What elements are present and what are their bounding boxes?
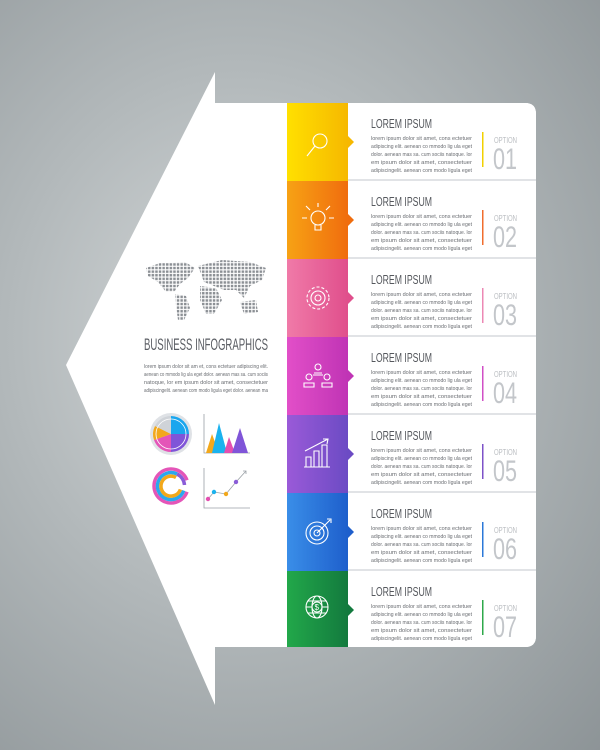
row 07: em ipsum dolor sit amet, consectetuer (371, 628, 472, 634)
row 07: adipiscing elit. aenean co mmodo lig ula eget (371, 612, 472, 618)
row 01: dolor. aenean mas sa. cum sociis natoque. lor (371, 152, 472, 158)
intro text: lorem ipsum dolor sit am et, cons ectetuer adipiscing elit. (144, 364, 268, 370)
icon: line chart (204, 468, 250, 508)
row 06: dolor. aenean mas sa. cum sociis natoque. lor (371, 542, 472, 548)
row 05: 05 (493, 455, 517, 488)
intro text: aenean co mmodo lig ula eget dolor. aenean mas sa. cum sociis (144, 372, 268, 378)
row 06: adipiscingelit. aenean com modo ligula eget (371, 558, 472, 564)
row 07: $ (314, 603, 320, 612)
row 07: dolor. aenean mas sa. cum sociis natoque. lor (371, 620, 472, 626)
row 03 (287, 259, 536, 337)
row 05: dolor. aenean mas sa. cum sociis natoque. lor (371, 464, 472, 470)
row 02: adipiscing elit. aenean co mmodo lig ula eget (371, 222, 472, 228)
row 01 (287, 103, 536, 181)
row 04: LOREM IPSUM (371, 350, 432, 365)
row 05: LOREM IPSUM (371, 428, 432, 443)
row 01: LOREM IPSUM (371, 116, 432, 131)
row 02: 02 (493, 221, 517, 254)
row 05: OPTION (494, 448, 517, 457)
row 02: LOREM IPSUM (371, 194, 432, 209)
row 06: LOREM IPSUM (371, 506, 432, 521)
row 04: em ipsum dolor sit amet, consectetuer (371, 394, 472, 400)
row 04: adipiscing elit. aenean co mmodo lig ula eget (371, 378, 472, 384)
row 06: 06 (493, 533, 517, 566)
row 04: adipiscingelit. aenean com modo ligula eget (371, 402, 472, 408)
row 06: em ipsum dolor sit amet, consectetuer (371, 550, 472, 556)
heading: business infographics: BUSINESS INFOGRAPHICS (144, 335, 268, 354)
row 03: adipiscingelit. aenean com modo ligula eget (371, 324, 472, 330)
row 03: 03 (493, 299, 517, 332)
row 01: adipiscing elit. aenean co mmodo lig ula eget (371, 144, 472, 150)
row 03: lorem ipsum dolor sit amet, cons ectetuer (371, 292, 472, 298)
row 07: lorem ipsum dolor sit amet, cons ectetuer (371, 604, 472, 610)
row 07: adipiscingelit. aenean com modo ligula eget (371, 636, 472, 642)
row 02: OPTION (494, 214, 517, 223)
row 06: OPTION (494, 526, 517, 535)
row 02: dolor. aenean mas sa. cum sociis natoque. lor (371, 230, 472, 236)
row 02: lorem ipsum dolor sit amet, cons ectetuer (371, 214, 472, 220)
row 06 (287, 493, 536, 571)
row 03: LOREM IPSUM (371, 272, 432, 287)
arrow shape (66, 72, 536, 705)
row 05: em ipsum dolor sit amet, consectetuer (371, 472, 472, 478)
icon: triangle chart (204, 414, 250, 453)
row 05 (287, 415, 536, 493)
row 02: em ipsum dolor sit amet, consectetuer (371, 238, 472, 244)
row 05: lorem ipsum dolor sit amet, cons ectetuer (371, 448, 472, 454)
intro text: adipiscingelit. aenean com modo ligula eget dolor. aenean ma (144, 388, 268, 394)
row 03: dolor. aenean mas sa. cum sociis natoque. lor (371, 308, 472, 314)
row 04: 04 (493, 377, 517, 410)
icon: ring chart (154, 469, 187, 503)
row 01: 01 (493, 143, 517, 176)
intro text (144, 364, 268, 394)
row 04: lorem ipsum dolor sit amet, cons ectetuer (371, 370, 472, 376)
row 01: lorem ipsum dolor sit amet, cons ectetuer (371, 136, 472, 142)
row 03: em ipsum dolor sit amet, consectetuer (371, 316, 472, 322)
row 07: OPTION (494, 604, 517, 613)
row 03: adipiscing elit. aenean co mmodo lig ula eget (371, 300, 472, 306)
row 01: OPTION (494, 136, 517, 145)
row 06: adipiscing elit. aenean co mmodo lig ula eget (371, 534, 472, 540)
row 04: dolor. aenean mas sa. cum sociis natoque. lor (371, 386, 472, 392)
row 07: LOREM IPSUM (371, 584, 432, 599)
row 02: adipiscingelit. aenean com modo ligula eget (371, 246, 472, 252)
row 07: 07 (493, 611, 517, 644)
option rows (287, 103, 536, 647)
row 01: adipiscingelit. aenean com modo ligula eget (371, 168, 472, 174)
row 01: em ipsum dolor sit amet, consectetuer (371, 160, 472, 166)
world map (146, 260, 266, 320)
row 06: lorem ipsum dolor sit amet, cons ectetuer (371, 526, 472, 532)
row 04: OPTION (494, 370, 517, 379)
row 05: adipiscingelit. aenean com modo ligula eget (371, 480, 472, 486)
icon: pie chart (150, 413, 192, 455)
row 07 (287, 571, 536, 647)
row 03: OPTION (494, 292, 517, 301)
intro text: natoque, lor em ipsum dolor sit amet, consectetuer (144, 380, 268, 386)
row 04 (287, 337, 536, 415)
row 05: adipiscing elit. aenean co mmodo lig ula eget (371, 456, 472, 462)
row 02 (287, 181, 536, 259)
